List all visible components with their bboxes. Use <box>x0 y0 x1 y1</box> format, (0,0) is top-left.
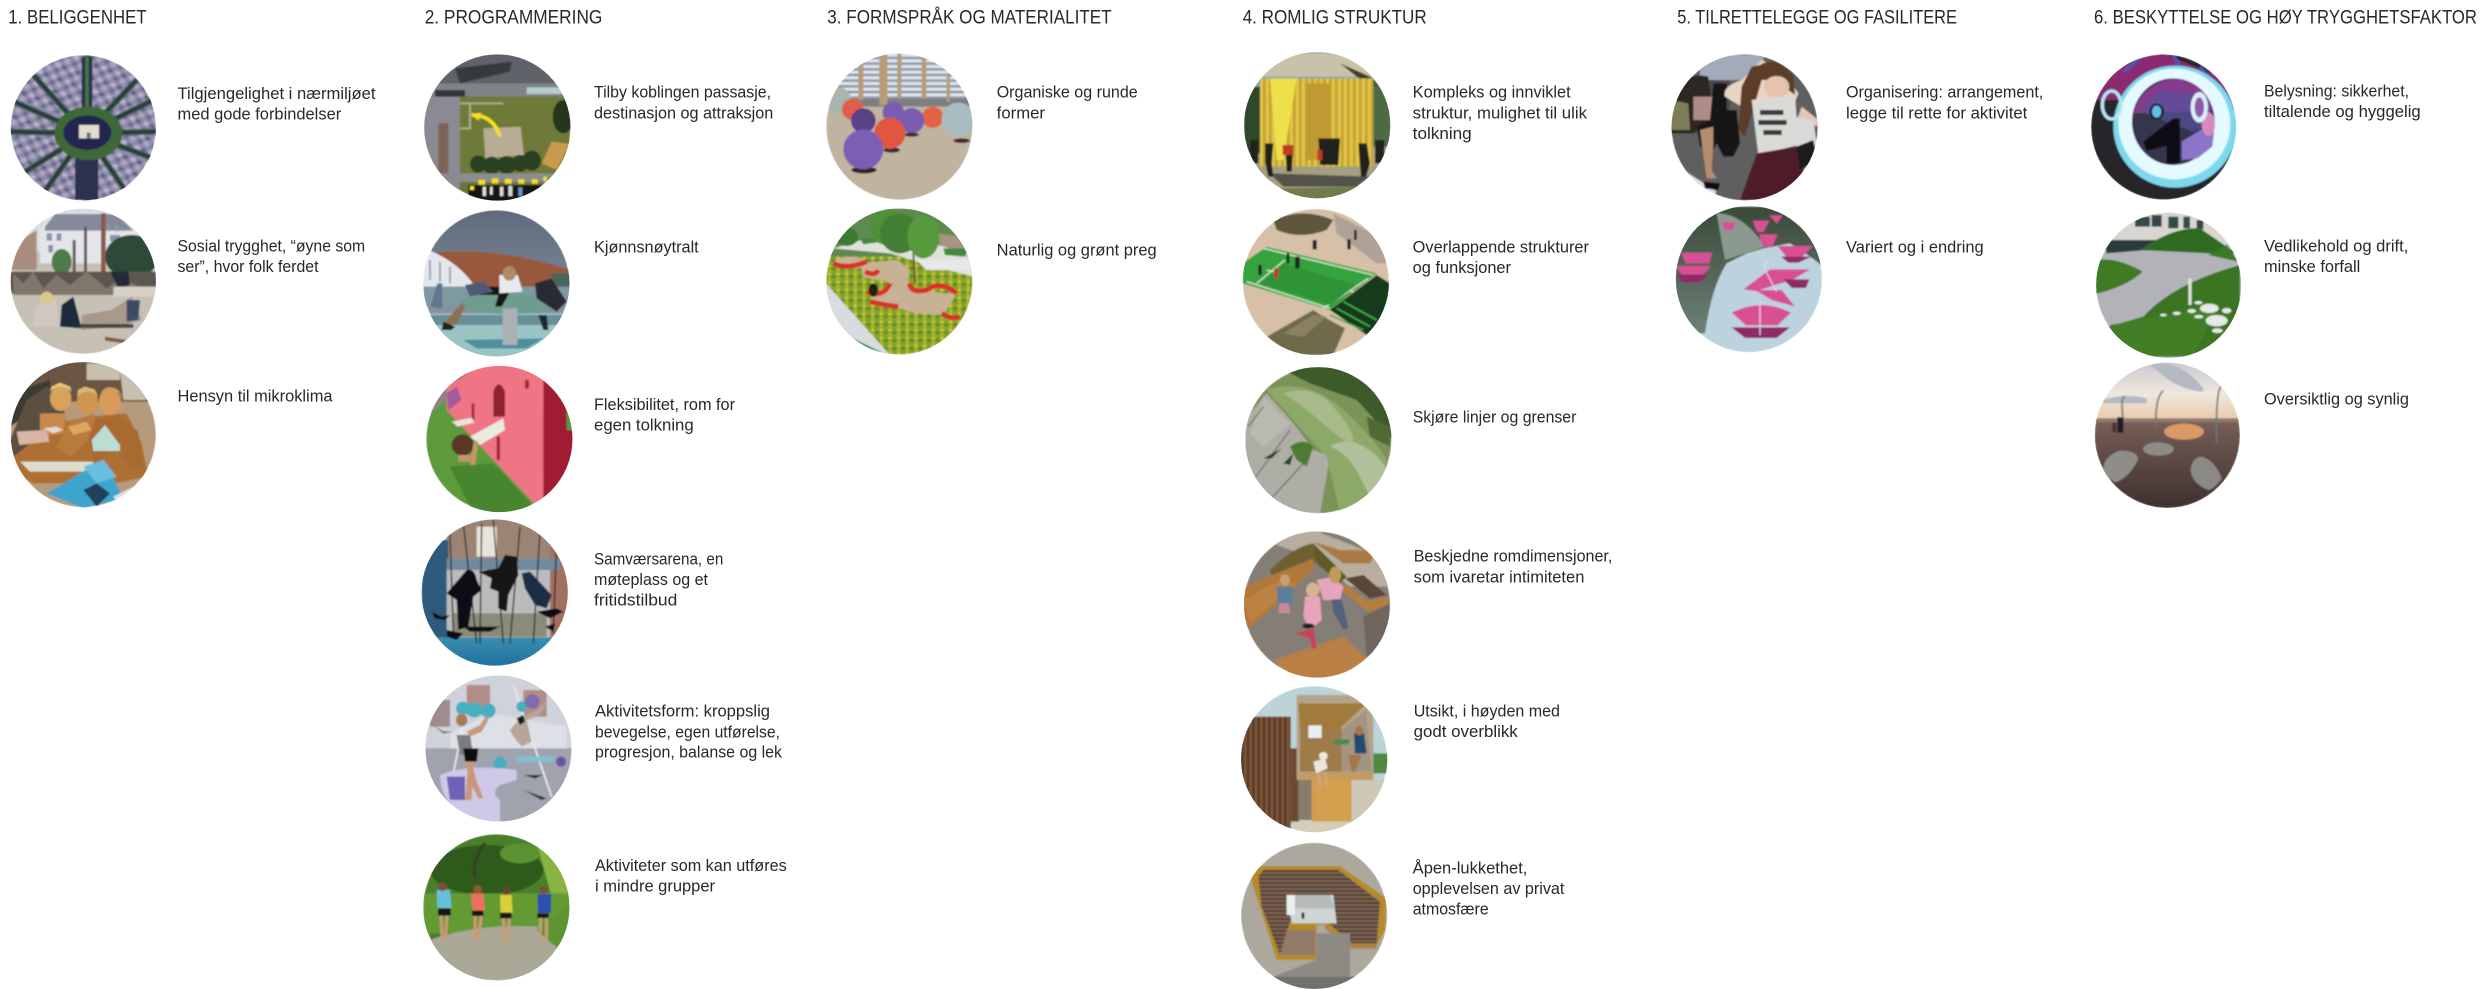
item: vedlikehold <box>2096 213 2408 358</box>
item: samværsarena <box>421 518 723 667</box>
heading: 3. Formspråk og materialitet: 3. FORMSPRÅK OG MATERIALITET <box>827 7 1112 28</box>
text: passasje <box>594 84 773 122</box>
photo: children running between wooden planters <box>1243 530 1390 678</box>
item: tilgjengelighet <box>9 55 376 202</box>
photo: gymnast with balls on plaza <box>425 675 572 822</box>
photo: wooden niche in concrete wall <box>1240 843 1390 989</box>
text: kompleks struktur: tolkning <box>1413 125 1472 143</box>
item: organiske former <box>826 53 1138 200</box>
photo: crowd on a city square <box>10 208 158 354</box>
item: aktivitetsform <box>425 675 783 822</box>
text: samværsarena <box>594 550 723 609</box>
photo: person in glowing ring swing <box>2091 53 2237 200</box>
photo: yellow curtain installation <box>1244 52 1391 200</box>
text: samværsarena: Samværsarena, en <box>594 550 723 568</box>
heading: 4. Romlig struktur: 4. ROMLIG STRUKTUR <box>1243 7 1427 28</box>
text: organisering: legge til rette for aktivitet <box>1846 104 2028 122</box>
text: overlappende strukturer: og funksjoner <box>1413 259 1512 277</box>
panel: 6. Beskyttelse og høy trygghetsfaktor <box>2091 7 2477 508</box>
text: utsikt: Utsikt, i høyden med <box>1414 702 1560 720</box>
item: passasje <box>423 53 773 202</box>
item: organisering <box>1670 54 2043 202</box>
heading: 2. Programmering: 2. PROGRAMMERING <box>425 7 602 28</box>
photo: dancers in a street <box>1670 54 1818 202</box>
photo: ornamental grass over paving <box>1245 367 1393 513</box>
text: sosial trygghet: ser”, hvor folk ferdet <box>178 258 319 276</box>
item: variert <box>1675 206 1984 352</box>
text: sosial trygghet: Sosial trygghet, “øyne som <box>178 238 365 256</box>
text: vedlikehold: Vedlikehold og drift, <box>2264 238 2408 256</box>
text: fleksibilitet <box>594 396 736 435</box>
text: beskjedne romdimensjoner <box>1414 548 1612 586</box>
text: organiske former: former <box>997 104 1046 122</box>
text: organisering <box>1846 84 2043 122</box>
photo: people on rope swings above blue floor <box>421 518 570 667</box>
text: beskjedne romdimensjoner: som ivaretar intimiteten <box>1414 568 1584 586</box>
panel: 1. Beliggenhet <box>8 7 376 510</box>
text: tilgjengelighet: med gode forbindelser <box>178 106 342 124</box>
item: sosial trygghet <box>10 208 365 354</box>
text: aktivitetsform: bevegelse, egen utførelse, <box>595 723 780 741</box>
item: mindre grupper <box>423 833 787 980</box>
text: fleksibilitet: egen tolkning <box>594 417 694 435</box>
photo: aerial view of radial avenues <box>9 55 157 202</box>
text: belysning: tiltalende og hyggelig <box>2264 103 2421 121</box>
panel: 4. Romlig struktur <box>1240 7 1612 989</box>
text: aktivitetsform: Aktivitetsform: kroppslig <box>595 703 770 721</box>
text: belysning <box>2264 82 2421 121</box>
text: organiske former <box>997 84 1138 122</box>
panel: 3. Formspråk og materialitet <box>826 7 1157 355</box>
photo: boardwalk at sunset <box>2093 362 2242 508</box>
text: organiske former: Organiske og runde <box>997 84 1138 102</box>
text: fleksibilitet: Fleksibilitet, rom for <box>594 396 736 414</box>
photo: coloured spheres on a floor <box>826 53 975 200</box>
photo: green garden with red benches <box>826 208 973 355</box>
item: mikroklima <box>10 362 333 510</box>
text: sosial trygghet <box>178 238 365 276</box>
photo: green tennis court on a plaza <box>1243 209 1390 355</box>
text: tilgjengelighet <box>178 85 376 124</box>
item: naturlig preg <box>826 208 1157 355</box>
item: skjøre linjer <box>1245 367 1577 513</box>
text: åpen-lukkethet: Åpen-lukkethet, <box>1413 858 1527 877</box>
item: oversiktlig <box>2093 362 2409 508</box>
heading: 5. Tilrettelegge og fasilitere: 5. TILRETTELEGGE OG FASILITERE <box>1677 7 1957 28</box>
text: skjøre linjer: Skjøre linjer og grenser <box>1413 409 1577 427</box>
text: mindre grupper <box>595 857 787 896</box>
text: overlappende strukturer <box>1413 238 1590 277</box>
photo: round disc seat under stormy sky <box>423 210 572 358</box>
panel: 5. Tilrettelegge og fasilitere <box>1670 7 2043 352</box>
text: mikroklima: Hensyn til mikroklima <box>178 387 333 405</box>
text: overlappende strukturer: Overlappende strukturer <box>1413 238 1590 256</box>
text: utsikt: godt overblikk <box>1414 723 1519 741</box>
text: beskjedne romdimensjoner: Beskjedne romdimensjoner, <box>1414 548 1612 566</box>
panel: 2. Programmering <box>421 7 787 980</box>
photo: children in elevated wooden lookout <box>1240 686 1388 833</box>
text: kompleks struktur: Kompleks og innviklet <box>1413 84 1571 102</box>
text: passasje: Tilby koblingen passasje, <box>594 84 771 102</box>
item: åpen-lukkethet <box>1240 843 1565 989</box>
text: organisering: Organisering: arrangement, <box>1846 84 2043 102</box>
item: overlappende strukturer <box>1243 209 1590 355</box>
item: belysning <box>2091 53 2421 200</box>
text: åpen-lukkethet: opplevelsen av privat <box>1413 880 1565 898</box>
photo: aerial of park with yellow arrow <box>423 53 574 202</box>
photo: sunbathing girls <box>10 362 157 510</box>
text: variert: Variert og i endring <box>1846 238 1984 256</box>
text: åpen-lukkethet: atmosfære <box>1413 901 1489 919</box>
text: aktivitetsform: progresjon, balanse og lek <box>595 744 783 762</box>
item: kompleks struktur <box>1244 52 1588 200</box>
text: passasje: destinasjon og attraksjon <box>594 104 773 122</box>
item: kjønnsnøytralt <box>423 210 699 358</box>
item: beskjedne romdimensjoner <box>1243 530 1612 678</box>
text: naturlig preg: Naturlig og grønt preg <box>997 241 1157 259</box>
text: samværsarena: fritidstilbud <box>594 591 677 609</box>
text: mindre grupper: i mindre grupper <box>595 878 716 896</box>
text: kompleks struktur: struktur, mulighet til ulik <box>1413 104 1588 122</box>
text: utsikt <box>1414 702 1560 741</box>
text: vedlikehold: minske forfall <box>2264 258 2360 276</box>
text: samværsarena: møteplass og et <box>594 571 708 589</box>
heading: 1. Beliggenhet: 1. BELIGGENHET <box>8 7 147 28</box>
photo: pink umbrellas floating on water <box>1675 206 1823 352</box>
text: kjønnsnøytralt: Kjønnsnøytralt <box>594 238 699 256</box>
photo: grass mounds and paved path <box>2096 213 2241 358</box>
item: utsikt <box>1240 686 1560 833</box>
text: mindre grupper: Aktiviteter som kan utføres <box>595 857 787 875</box>
text: aktivitetsform <box>595 703 783 762</box>
photo: pink wall and child on grass <box>426 365 573 513</box>
photo: four runners on a park path <box>423 833 570 980</box>
text: vedlikehold <box>2264 238 2408 276</box>
text: åpen-lukkethet <box>1413 858 1565 919</box>
text: kompleks struktur <box>1413 84 1588 143</box>
text: belysning: Belysning: sikkerhet, <box>2264 82 2409 100</box>
item: fleksibilitet <box>426 365 736 513</box>
text: oversiktlig: Oversiktlig og synlig <box>2264 390 2409 408</box>
text: tilgjengelighet: Tilgjengelighet i nærmiljøet <box>178 85 376 103</box>
